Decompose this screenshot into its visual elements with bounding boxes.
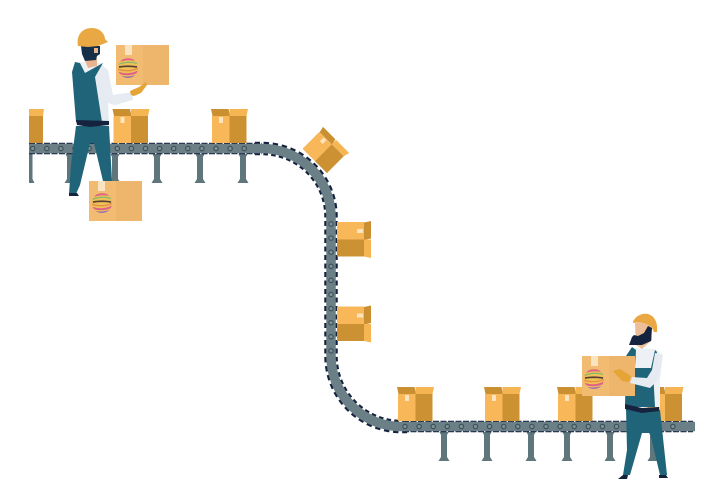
box: vertical section upper <box>337 221 371 258</box>
held box right <box>582 356 635 396</box>
box: bottom conveyor 4 <box>646 387 684 421</box>
logo on held box <box>117 58 139 78</box>
box: vertical section lower <box>337 306 371 342</box>
arm and glove right <box>613 353 663 388</box>
floor box left <box>89 181 142 221</box>
top conveyor legs <box>29 154 248 183</box>
box: bottom conveyor 1 <box>397 387 434 421</box>
worker right <box>618 314 668 479</box>
worker left <box>69 28 133 196</box>
box: top partial <box>29 109 44 143</box>
box: bottom conveyor 2 <box>484 387 521 421</box>
conveyor belt <box>29 148 695 426</box>
glove left <box>130 82 147 96</box>
box: top conveyor 2 <box>112 109 150 143</box>
logo on floor box <box>91 193 113 213</box>
box: top conveyor 3 <box>211 109 248 143</box>
box: bottom conveyor 3 <box>557 387 594 421</box>
held box left <box>116 45 169 85</box>
logo on held box <box>583 369 605 389</box>
box: tilted on curve <box>302 127 349 174</box>
bottom conveyor legs <box>438 432 658 461</box>
